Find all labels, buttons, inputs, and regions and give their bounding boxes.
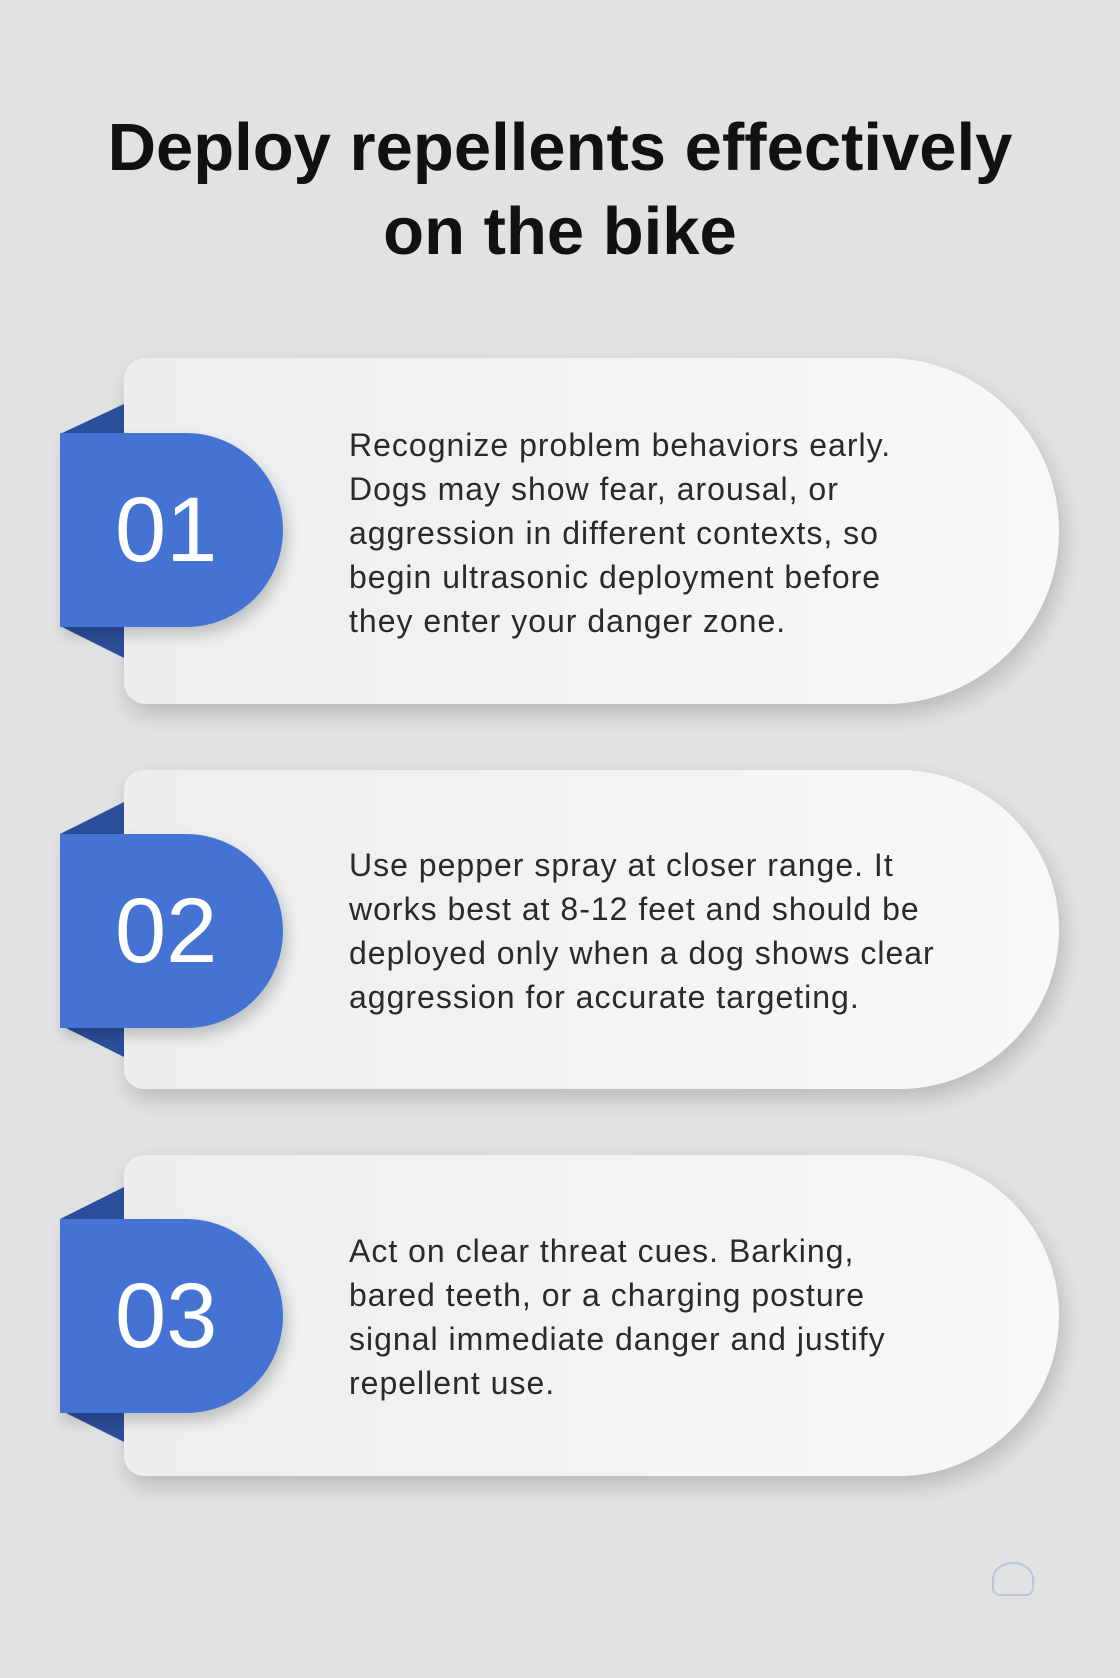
fold bottom 3 xyxy=(60,1410,124,1442)
text 1: they enter your danger zone. xyxy=(349,603,786,639)
text 2: aggression for accurate targeting. xyxy=(349,979,860,1015)
text 2 xyxy=(349,847,935,1015)
card 2 xyxy=(124,770,1059,1089)
step 1 xyxy=(58,358,1071,722)
card 1 xyxy=(124,358,1059,704)
number 03: 03 xyxy=(115,1265,217,1367)
text 3: bared teeth, or a charging posture xyxy=(349,1277,865,1313)
title: on the bike xyxy=(383,194,737,269)
title: Deploy repellents effectively xyxy=(108,110,1012,185)
number 02: 02 xyxy=(115,880,217,982)
fold top 3 xyxy=(60,1187,124,1219)
number 01 xyxy=(60,433,283,627)
text 3: Act on clear threat cues. Barking, xyxy=(349,1233,854,1269)
text 1: begin ultrasonic deployment before xyxy=(349,559,881,595)
text 2: deployed only when a dog shows clear xyxy=(349,935,935,971)
text 1: aggression in different contexts, so xyxy=(349,515,879,551)
fold top 1 xyxy=(60,404,124,434)
title xyxy=(108,110,1012,269)
text 1: Dogs may show fear, arousal, or xyxy=(349,471,839,507)
text 3 xyxy=(349,1233,886,1401)
step 2 xyxy=(58,770,1071,1108)
card 3 xyxy=(124,1155,1059,1476)
text 2: Use pepper spray at closer range. It xyxy=(349,847,894,883)
fold top 2 xyxy=(60,802,124,834)
fold bottom 2 xyxy=(60,1025,124,1057)
text 1 xyxy=(349,427,891,639)
text 2: works best at 8-12 feet and should be xyxy=(349,891,920,927)
text 3: repellent use. xyxy=(349,1365,555,1401)
number 03 xyxy=(60,1219,283,1413)
text 3: signal immediate danger and justify xyxy=(349,1321,886,1357)
logo xyxy=(992,1562,1034,1596)
number 02 xyxy=(60,834,283,1028)
fold bottom 1 xyxy=(60,626,124,658)
number 01: 01 xyxy=(115,479,217,581)
text 1: Recognize problem behaviors early. xyxy=(349,427,891,463)
